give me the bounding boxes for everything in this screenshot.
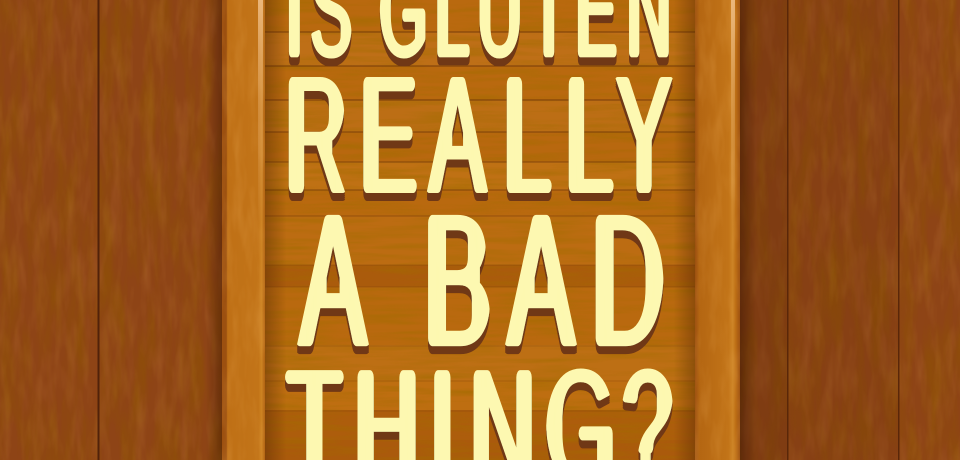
title: Is gluten really a bad thing? — [286, 0, 672, 460]
frame: right rail — [695, 0, 740, 460]
title line: A BAD: A BAD — [300, 175, 664, 387]
sign board: horizontal planks — [265, 0, 695, 460]
title line: REALLY: REALLY — [286, 41, 672, 228]
frame: left rail — [222, 0, 265, 460]
